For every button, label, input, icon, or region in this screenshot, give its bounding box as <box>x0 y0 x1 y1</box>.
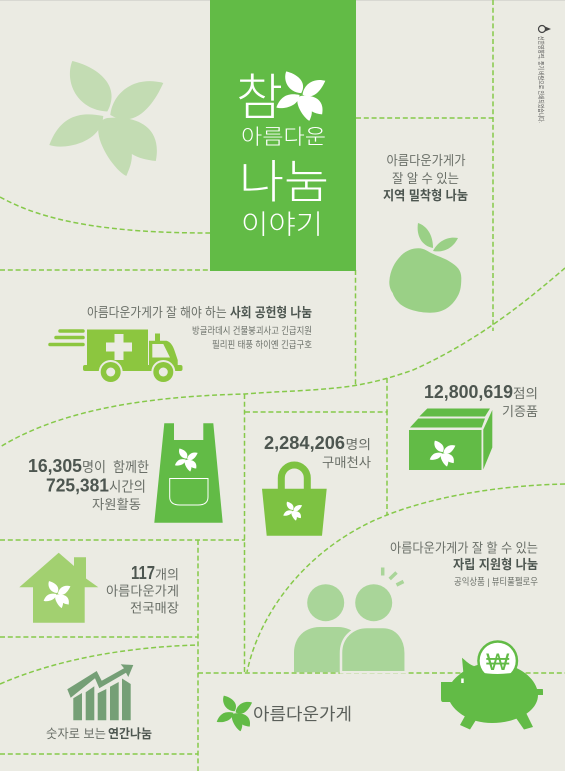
text: self-reliance sharing: 공익상품 | 뷰티풀펠로우 <box>454 576 538 588</box>
icon: piggy bank with coin <box>441 640 543 730</box>
text: volunteers: 함께한 <box>113 459 149 475</box>
title: 참: 참 <box>236 70 283 126</box>
text: self-reliance sharing: 아름다운가게가 잘 할 수 있는 <box>390 540 538 556</box>
icon: apron <box>154 423 223 523</box>
text: shoppers: 구매천사 <box>322 455 371 470</box>
title: 나눔: 나눔 <box>239 156 329 208</box>
text: annual sharing <box>46 727 152 741</box>
logo: Beautiful Store: 아름다운가게 <box>253 705 352 724</box>
icon: apron flower <box>175 448 198 472</box>
icon: ambulance <box>50 330 182 384</box>
text: annual sharing: 연간나눔 <box>108 727 152 741</box>
text: shoppers <box>264 433 371 470</box>
icon: piggy bank with coin: ₩ <box>486 649 510 676</box>
icon: tote bag <box>262 465 327 536</box>
icon: two people <box>294 568 406 672</box>
text: regional sharing <box>383 153 468 203</box>
text: social contribution sharing: 필리핀 태풍 하이옌 긴급구호 <box>212 339 312 351</box>
text: self-reliance sharing <box>390 540 538 588</box>
icon: rising bar chart <box>67 664 133 720</box>
text: donations <box>424 382 538 419</box>
text: stores: 개의 <box>155 567 179 582</box>
icon: tote bag flower <box>283 502 302 521</box>
title: 아름다운: 아름다운 <box>241 126 326 149</box>
icon: house flower <box>44 581 70 608</box>
text: volunteers: 명이 <box>82 459 106 475</box>
text: regional sharing: 지역 밀착형 나눔 <box>383 188 468 203</box>
text: social contribution sharing: 사회 공헌형 나눔 <box>230 305 312 320</box>
text: volunteers: 16,305 <box>28 456 82 476</box>
icon: box flower <box>430 441 455 466</box>
icon: house <box>19 553 98 623</box>
text: social contribution sharing: 아름다운가게가 잘 해야 하는 <box>87 305 227 320</box>
text: stores: 전국매장 <box>130 600 179 616</box>
icon: small drop and vertical notice: 선한영향력, 풍기 바람으로 인쇄되었습니다. <box>537 36 546 123</box>
icon: apple <box>389 223 461 313</box>
logo: Beautiful Store <box>217 696 352 731</box>
text: shoppers: 2,284,206 <box>264 433 345 453</box>
text: volunteers: 자원활동 <box>92 497 141 512</box>
text: regional sharing: 아름다운가게가 <box>386 153 466 168</box>
text: regional sharing: 잘 알 수 있는 <box>392 171 459 186</box>
text: social contribution sharing <box>87 305 312 351</box>
text: volunteers <box>28 456 149 512</box>
icon: title flower <box>276 71 325 121</box>
text: shoppers: 명의 <box>346 437 371 452</box>
text: annual sharing: 숫자로 보는 <box>46 727 106 741</box>
text: donations: 점의 <box>513 386 538 401</box>
icon: donation box <box>409 408 492 470</box>
text: self-reliance sharing: 자립 지원형 나눔 <box>453 557 538 572</box>
icon: small drop and vertical notice <box>537 26 551 123</box>
text: volunteers: 725,381 <box>46 476 109 496</box>
text: stores: 117 <box>131 563 155 583</box>
title panel <box>210 0 356 271</box>
icon: large pale flower <box>49 61 163 176</box>
text: donations: 12,800,619 <box>424 382 513 402</box>
text: volunteers: 시간의 <box>109 478 146 494</box>
text: stores <box>106 563 179 616</box>
text: donations: 기증품 <box>502 404 538 419</box>
text: stores: 아름다운가게 <box>106 584 179 598</box>
text: social contribution sharing: 방글라데시 건물붕괴사고 긴급지원 <box>192 326 312 337</box>
title: 이야기: 이야기 <box>241 210 323 240</box>
